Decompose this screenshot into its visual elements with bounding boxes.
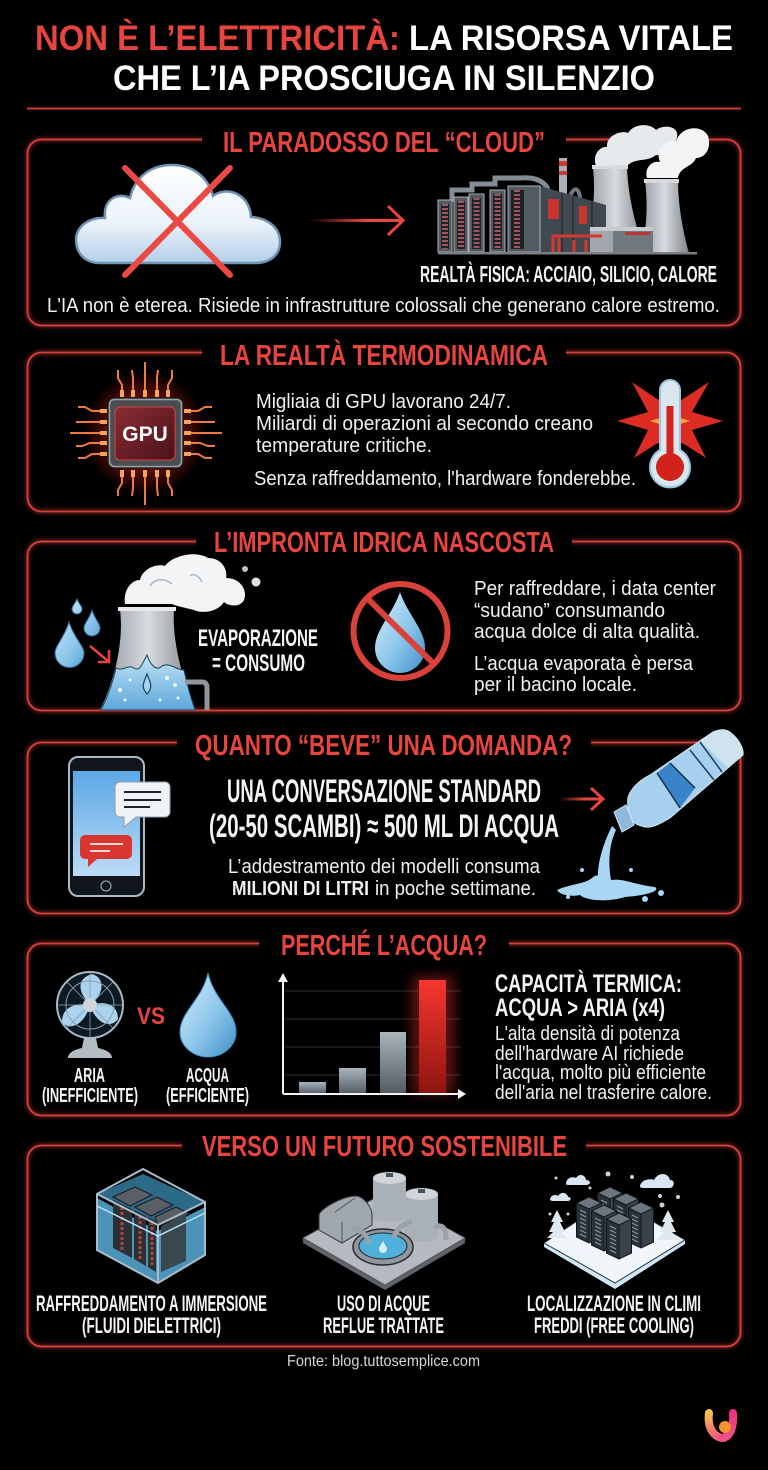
heading: thermodynamics: LA REALTÀ TERMODINAMICA (220, 338, 548, 372)
icon: water treatment plant (303, 1172, 465, 1290)
text: water explanation: “sudano” consumando (474, 600, 665, 622)
text: description: L'IA non è eterea. Risiede in infrastrutture colossali che generano calore estremo. (47, 295, 720, 317)
icon: immersion tank (97, 1169, 205, 1283)
labels: air and water: ACQUA (186, 1065, 229, 1087)
labels: solutions: RAFFREDDAMENTO A IMMERSIONE (36, 1291, 267, 1316)
icon: phone with chat bubbles (69, 757, 170, 896)
labels: air and water: ARIA (74, 1065, 105, 1087)
arrow (558, 788, 603, 810)
label: evaporation equals consumption: = CONSUMO (212, 650, 305, 677)
text: training consumption (228, 856, 541, 900)
text: thermal explanation: l'acqua, molto più efficiente (495, 1062, 706, 1084)
title: NON È L’ELETTRICITÀ: (35, 18, 400, 58)
icon: logo (709, 1413, 733, 1438)
text: thermal explanation: dell'aria nel trasferire calore. (495, 1082, 712, 1104)
text: thermal explanation: dell'hardware AI richiede (495, 1043, 684, 1065)
icon: fan (57, 972, 123, 1058)
text: water explanation: per il bacino locale. (474, 674, 637, 696)
labels: air and water (42, 1065, 249, 1107)
labels: solutions: USO DI ACQUE (337, 1291, 430, 1316)
labels: air and water: (INEFFICIENTE) (42, 1085, 138, 1107)
heading: thermal capacity: CAPACITÀ TERMICA: (495, 969, 682, 998)
bar chart (278, 973, 466, 1099)
icon: pouring bottle (557, 730, 743, 902)
title: LA RISORSA VITALE (409, 19, 733, 58)
heading: water footprint: L’IMPRONTA IDRICA NASCOSTA (214, 527, 554, 559)
label: evaporation equals consumption (198, 625, 318, 677)
label: VS: VS (137, 1003, 165, 1030)
heading: sustainable future: VERSO UN FUTURO SOSTENIBILE (202, 1131, 567, 1163)
text: water explanation: L’acqua evaporata è persa (474, 653, 694, 675)
icon: GPU chip: GPU (122, 423, 168, 446)
source line: Fonte: blog.tuttosemplice.com (287, 1353, 480, 1370)
icon: water drop (180, 973, 236, 1057)
panel: sustainable future (28, 1131, 740, 1346)
labels: air and water: (EFFICIENTE) (166, 1085, 249, 1107)
text: training consumption: in poche settimane. (375, 878, 536, 900)
panel: water per query (28, 730, 743, 914)
title: CHE L’IA PROSCIUGA IN SILENZIO (113, 59, 655, 98)
text: GPU description: Miliardi di operazioni al secondo creano (256, 413, 593, 435)
icon: GPU chip (70, 362, 222, 505)
text: training consumption: L’addestramento dei modelli consuma (228, 856, 541, 878)
stat: conversation cost: (20-50 SCAMBI) ≈ 500 ML DI ACQUA (209, 808, 559, 844)
icon: thermometer with burst (617, 380, 723, 487)
text: water explanation: acqua dolce di alta qualità. (474, 621, 700, 643)
text: training consumption: MILIONI DI LITRI (232, 878, 369, 900)
text: GPU description: Migliaia di GPU lavorano 24/7. (256, 391, 511, 413)
text: GPU description: Senza raffreddamento, l'hardware fonderebbe. (254, 468, 636, 490)
labels: solutions (36, 1291, 701, 1338)
heading: thermal capacity (495, 969, 682, 1022)
icon: data center with cooling towers (438, 125, 709, 254)
labels: solutions: (FLUIDI DIELETTRICI) (82, 1313, 221, 1338)
text: thermal explanation (495, 1023, 712, 1104)
labels: solutions: REFLUE TRATTATE (323, 1313, 444, 1338)
heading: cloud paradox: IL PARADOSSO DEL “CLOUD” (223, 127, 545, 159)
text: water explanation (474, 578, 716, 696)
stat: conversation cost (209, 773, 559, 844)
arrow (310, 206, 403, 235)
label: evaporation equals consumption: EVAPORAZIONE (198, 625, 318, 652)
icon: no water (354, 584, 448, 678)
panel: water footprint (28, 527, 740, 710)
panel: thermodynamics (28, 338, 740, 512)
stat: conversation cost: UNA CONVERSAZIONE STANDARD (227, 773, 541, 809)
title (35, 18, 733, 98)
text: thermal explanation: L'alta densità di potenza (495, 1023, 681, 1045)
panel: why water (28, 928, 740, 1116)
text: GPU description: temperature critiche. (256, 435, 432, 457)
heading: thermal capacity: ACQUA > ARIA (x4) (495, 994, 665, 1022)
text: water explanation: Per raffreddare, i data center (474, 578, 716, 600)
heading: water per query: QUANTO “BEVE” UNA DOMANDA? (195, 730, 572, 762)
icon: cooling tower (55, 554, 260, 710)
text: GPU description (254, 391, 636, 490)
icon: cold climate servers (544, 1172, 685, 1289)
panel: cloud paradox (28, 125, 740, 326)
heading: why water: PERCHÉ L’ACQUA? (281, 928, 487, 962)
icon: crossed cloud (76, 165, 280, 275)
